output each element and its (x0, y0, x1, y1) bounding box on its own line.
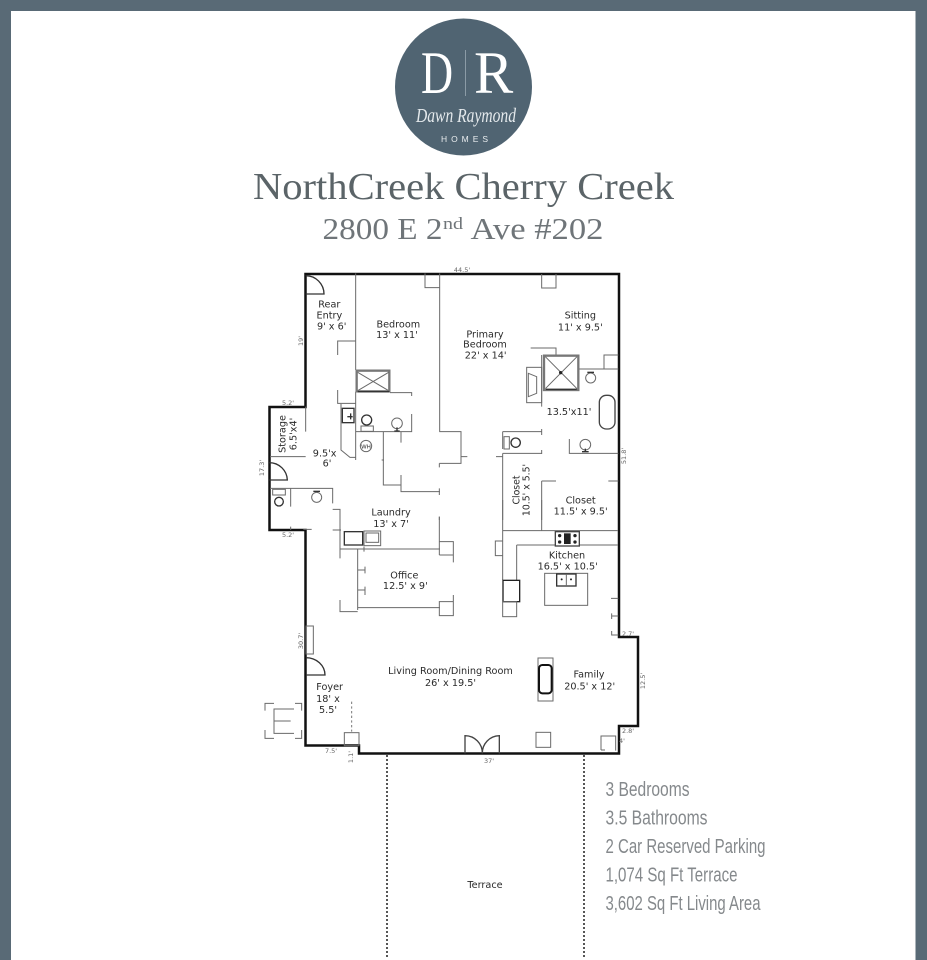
property facts list: 3.5 Bathrooms (606, 808, 708, 830)
column (344, 733, 359, 746)
label: bedroom: 13' x 11' (376, 330, 418, 341)
label: terrace: Terrace (466, 880, 503, 891)
label: hall: 6' (323, 459, 331, 470)
label: storage: Storage (277, 415, 288, 453)
dimension labels: 19' (297, 336, 305, 346)
exterior walls (270, 274, 638, 754)
address: Ave #202 (470, 211, 604, 246)
bedroom shower (357, 371, 389, 392)
columns (536, 732, 616, 751)
french doors (465, 736, 499, 753)
south-east rooms: kitchen, living, family (465, 500, 618, 753)
label: primary bedroom: Bedroom (463, 339, 507, 350)
label: closet right: Closet (566, 496, 596, 507)
dimension labels: 44.5' (454, 266, 470, 274)
dimension labels: 1.1' (347, 751, 355, 763)
north-west rooms: rear entry, bedroom, storage (269, 273, 440, 507)
label: primary bedroom: 22' x 14' (465, 350, 507, 361)
label: storage: 6.5'x4' (288, 418, 299, 450)
dimension labels (258, 266, 647, 765)
label: primary bath: 13.5'x11' (547, 407, 591, 418)
address: 2800 E 2 (322, 211, 442, 246)
label: office: 12.5' x 9' (383, 581, 428, 592)
primary toilet (504, 437, 520, 449)
title: NorthCreek Cherry Creek (253, 166, 674, 208)
partition walls (439, 274, 618, 520)
label: bedroom: Bedroom (376, 319, 420, 330)
label: rear entry: Entry (316, 311, 342, 322)
logo badge: Dawn Raymond (415, 105, 517, 127)
bench (527, 367, 542, 403)
logo badge: R (474, 39, 514, 106)
logo badge (395, 18, 532, 156)
north-east rooms: primary suite (439, 274, 618, 520)
storage door (269, 463, 287, 480)
partition walls (495, 500, 618, 635)
partition walls (270, 273, 440, 507)
label: foyer: 18' x (316, 694, 340, 705)
toilet (361, 415, 373, 431)
south-west rooms: laundry, office, foyer (265, 507, 453, 746)
label: closet left: Closet (511, 475, 522, 505)
property facts list: 1,074 Sq Ft Terrace (606, 864, 738, 886)
floor plan (258, 266, 647, 958)
dimension labels: 5.2' (282, 399, 294, 407)
wall niche (306, 626, 313, 654)
dimension labels: 5.2' (282, 531, 294, 539)
address (322, 211, 604, 246)
label: sitting: Sitting (565, 311, 596, 322)
kitchen island (545, 573, 588, 605)
water heater (360, 440, 372, 452)
kitchen sink (557, 574, 576, 586)
label: family: Family (573, 669, 605, 680)
label: rear entry: Rear (318, 300, 340, 311)
powder room toilet (273, 489, 285, 506)
label: hall: 9.5'x (313, 449, 337, 460)
dimension labels: 2.7' (622, 630, 634, 638)
dryer (364, 531, 381, 546)
label: closet left: 10.5' x 5.5' (521, 464, 532, 516)
label: kitchen: 16.5' x 10.5' (538, 561, 598, 572)
label: family: 20.5' x 12' (564, 681, 615, 692)
label: laundry: Laundry (371, 507, 411, 518)
dimension labels: 2.8' (622, 727, 634, 735)
fireplace (538, 658, 553, 701)
powder room sink (312, 491, 322, 502)
dimension labels: 30.7' (297, 633, 305, 649)
sink (392, 418, 402, 431)
dimension labels: 7.5' (325, 747, 337, 755)
refrigerator (503, 580, 520, 602)
label: sitting: 11' x 9.5' (558, 322, 603, 333)
range (555, 532, 579, 546)
label: rear entry: 9' x 6' (317, 321, 346, 332)
label: primary bedroom: Primary (466, 329, 504, 340)
label: foyer: Foyer (316, 682, 343, 693)
primary shower (544, 356, 578, 390)
washer (344, 532, 363, 545)
property facts list: 3,602 Sq Ft Living Area (606, 893, 761, 915)
label: closet right: 11.5' x 9.5' (554, 507, 608, 518)
water heater: WH (361, 444, 371, 450)
terrace boundary dashed lines (387, 755, 584, 958)
dimension labels: 4' (619, 737, 625, 745)
bath sink counter (342, 408, 354, 423)
primary sink 1 (586, 372, 596, 383)
dimension labels: 51.8' (620, 448, 628, 464)
foyer door (306, 658, 325, 675)
label: office: Office (390, 571, 418, 582)
label: living room and dining room: 26' x 19.5' (425, 678, 476, 689)
property facts list (606, 779, 766, 915)
logo badge: HOMES (441, 134, 488, 144)
address: nd (443, 214, 464, 233)
foyer dashed line (350, 702, 353, 732)
dimension labels: 17.3' (258, 460, 266, 476)
property facts list: 2 Car Reserved Parking (606, 836, 766, 858)
label: foyer: 5.5' (319, 705, 337, 716)
partition walls (291, 509, 453, 616)
bathtub (599, 395, 615, 429)
entry steps (265, 703, 302, 738)
dimension labels: 37' (484, 757, 494, 765)
label: laundry: 13' x 7' (373, 519, 409, 530)
dimension labels: 12.5' (639, 673, 647, 689)
label: living room and dining room: Living Room/Dining Room (388, 666, 513, 677)
primary sink 2 (580, 439, 591, 452)
label: kitchen: Kitchen (549, 551, 585, 562)
rear entry door (306, 276, 324, 294)
counter end (503, 602, 517, 617)
logo badge: D (421, 41, 453, 107)
property facts list: 3 Bedrooms (606, 779, 690, 801)
